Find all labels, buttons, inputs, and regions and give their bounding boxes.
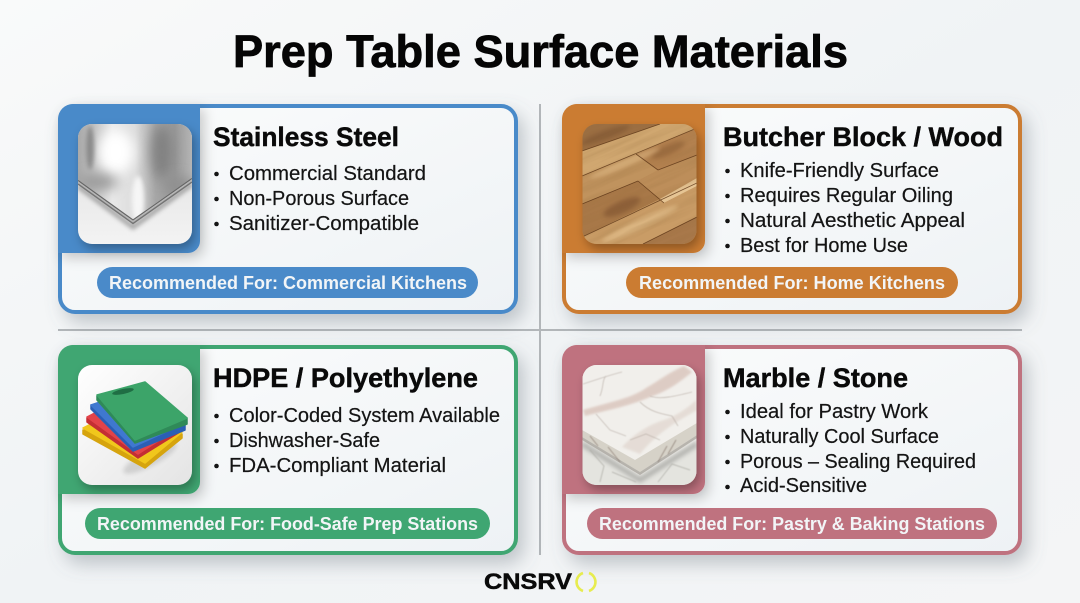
feature list: Acid-Sensitive <box>740 475 867 497</box>
title: Prep Table Surface Materials <box>233 26 848 77</box>
panel: Marble / Stone <box>562 345 1020 553</box>
panel: HDPE / Polyethylene <box>58 345 516 553</box>
icon: colored cutting boards <box>78 365 192 485</box>
recommendation pill <box>97 267 478 298</box>
heading: Butcher Block / Wood: Butcher Block / Wood <box>723 122 1003 152</box>
feature list: Ideal for Pastry Work <box>740 401 929 423</box>
feature list: Naturally Cool Surface <box>740 426 939 448</box>
panel: Butcher Block / Wood <box>557 100 1036 332</box>
icon: marble slab <box>582 365 697 485</box>
heading: Marble / Stone: Marble / Stone <box>723 363 908 393</box>
recommendation pill: Recommended For: Food-Safe Prep Stations <box>97 513 478 534</box>
recommendation pill: Recommended For: Home Kitchens <box>639 272 945 293</box>
recommendation pill: Recommended For: Commercial Kitchens <box>109 272 467 293</box>
feature list: Best for Home Use <box>740 235 908 257</box>
feature list: FDA-Compliant Material <box>229 455 446 477</box>
icon: wood planks <box>580 124 705 254</box>
feature list: Porous – Sealing Required <box>740 451 976 473</box>
recommendation pill <box>626 267 958 298</box>
feature list: Sanitizer-Compatible <box>229 213 419 235</box>
feature list: Requires Regular Oiling <box>740 185 953 207</box>
feature list: Dishwasher-Safe <box>229 430 380 452</box>
recommendation pill <box>85 508 490 539</box>
feature list <box>214 163 426 235</box>
logo: CNSRV <box>484 569 595 594</box>
feature list: Non-Porous Surface <box>229 188 409 210</box>
feature list: Knife-Friendly Surface <box>740 160 939 182</box>
feature list: Color-Coded System Available <box>229 405 500 427</box>
feature list <box>725 401 976 497</box>
heading: HDPE / Polyethylene: HDPE / Polyethylene <box>213 363 478 393</box>
feature list <box>214 405 500 477</box>
feature list: Natural Aesthetic Appeal <box>740 210 965 232</box>
logo: CNSRV: CNSRV <box>484 569 572 594</box>
feature list: Commercial Standard <box>229 163 426 185</box>
recommendation pill: Recommended For: Pastry & Baking Stations <box>599 513 985 534</box>
heading: Stainless Steel: Stainless Steel <box>213 122 399 152</box>
feature list <box>725 160 965 257</box>
recommendation pill <box>587 508 997 539</box>
icon: stainless steel sheet <box>78 124 194 244</box>
panel: Stainless Steel <box>58 104 516 312</box>
